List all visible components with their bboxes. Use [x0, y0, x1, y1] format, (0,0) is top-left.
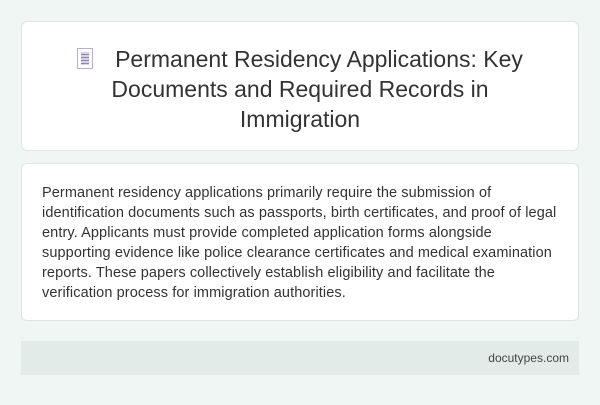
- description text: verification process for immigration authorities.: [42, 285, 346, 301]
- icon: document: [77, 48, 93, 69]
- description text: Permanent residency applications primarily require the submission of: [42, 185, 491, 201]
- title panel: [21, 21, 579, 151]
- description panel: [21, 163, 579, 321]
- description text: reports. These papers collectively establish eligibility and facilitate the: [42, 265, 495, 281]
- description text: supporting evidence like police clearance certificates and medical examination: [42, 245, 552, 261]
- title: Permanent Residency Applications: Key Documents and Required Records in Immigration: [111, 46, 523, 132]
- description text: [42, 185, 556, 301]
- description text: entry. Applicants must provide completed application forms alongside: [42, 225, 492, 241]
- footer bar: [21, 341, 579, 375]
- footer text: docutypes.com: [488, 351, 569, 365]
- description text: identification documents such as passports, birth certificates, and proof of legal: [42, 205, 556, 221]
